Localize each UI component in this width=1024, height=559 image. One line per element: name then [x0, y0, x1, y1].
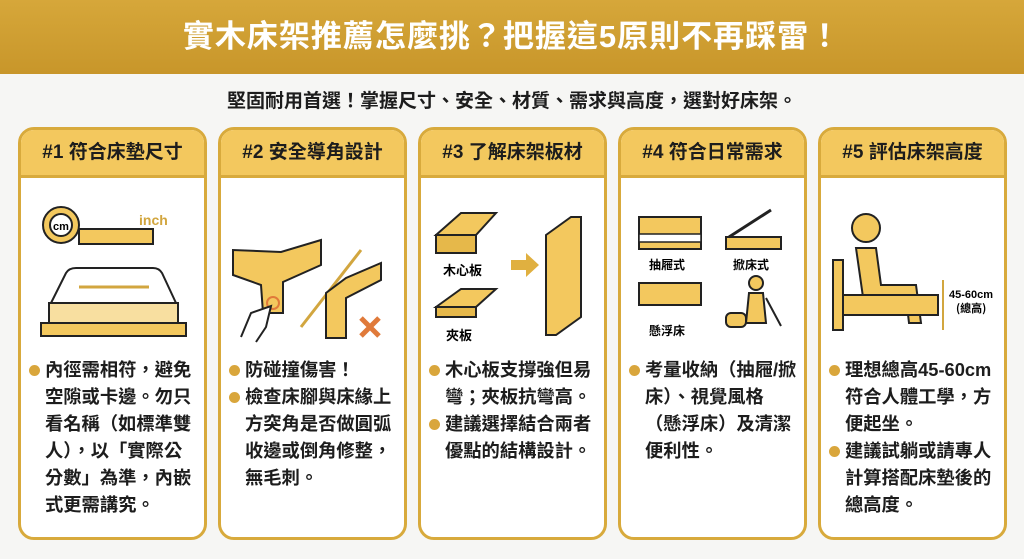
- icon: boards: [433, 212, 582, 344]
- panel: 3 board material: [418, 127, 607, 540]
- icon: boards: 夾板: [446, 325, 472, 344]
- text 2: 防碰撞傷害！: [245, 359, 355, 380]
- heading 5: [821, 130, 1004, 178]
- icon: bed types: 抽屜式: [649, 256, 685, 273]
- text 3: 木心板支撐強但易彎；夾板抗彎高。: [445, 359, 591, 407]
- icon: person sitting on bed: 45-60cm: [949, 289, 993, 301]
- text 2: 檢查床腳與床緣上方突角是否做圓弧收邊或倒角修整，無毛刺。: [245, 386, 391, 488]
- text 5: 建議試躺或請專人計算搭配床墊後的總高度。: [845, 440, 991, 515]
- panel: 5 bed height: [818, 127, 1007, 540]
- icon: bed types: 懸浮床: [649, 322, 685, 339]
- icon: person sitting on bed: [832, 213, 993, 331]
- icon: bed types: [638, 208, 782, 339]
- text 5: 理想總高45-60cm符合人體工學，方便起坐。: [845, 359, 991, 434]
- heading 1: #1 符合床墊尺寸: [42, 142, 183, 163]
- text 4: 考量收納（抽屜/掀床）、視覺風格（懸浮床）及清潔便利性。: [645, 359, 796, 461]
- heading 1: [21, 130, 204, 178]
- title: [0, 0, 1024, 74]
- heading 3: [421, 130, 604, 178]
- text 5: [829, 359, 991, 515]
- text 3: [429, 359, 591, 461]
- text 3: 建議選擇結合兩者優點的結構設計。: [445, 413, 591, 461]
- icon: tape measure and bed: inch: [139, 212, 168, 228]
- heading 4: #4 符合日常需求: [642, 142, 783, 163]
- icon: tape measure and bed: [40, 206, 187, 337]
- panel: 4 daily needs: [618, 127, 807, 540]
- icon: bed types: 掀床式: [733, 256, 769, 273]
- icon: person sitting on bed: (總高): [956, 300, 986, 316]
- panel: 2 safety corners: [218, 127, 407, 540]
- heading 5: #5 評估床架高度: [842, 142, 983, 163]
- heading 4: [621, 130, 804, 178]
- heading 2: [221, 130, 404, 178]
- title: 實木床架推薦怎麼挑？把握這5原則不再踩雷！: [183, 19, 841, 54]
- icon: rounded corner and hand: [232, 238, 382, 342]
- icon: tape measure and bed: cm: [53, 221, 69, 233]
- heading 2: #2 安全導角設計: [242, 142, 383, 163]
- heading 3: #3 了解床架板材: [442, 142, 583, 163]
- icon: boards: 木心板: [443, 260, 482, 279]
- panel: 1 mattress size: [18, 127, 207, 540]
- text 1: 內徑需相符，避免空隙或卡邊。勿只看名稱（如標準雙人），以「實際公分數」為準，內嵌式更需講究。: [45, 359, 191, 515]
- subtitle: 堅固耐用首選！掌握尺寸、安全、材質、需求與高度，選對好床架。: [227, 91, 797, 112]
